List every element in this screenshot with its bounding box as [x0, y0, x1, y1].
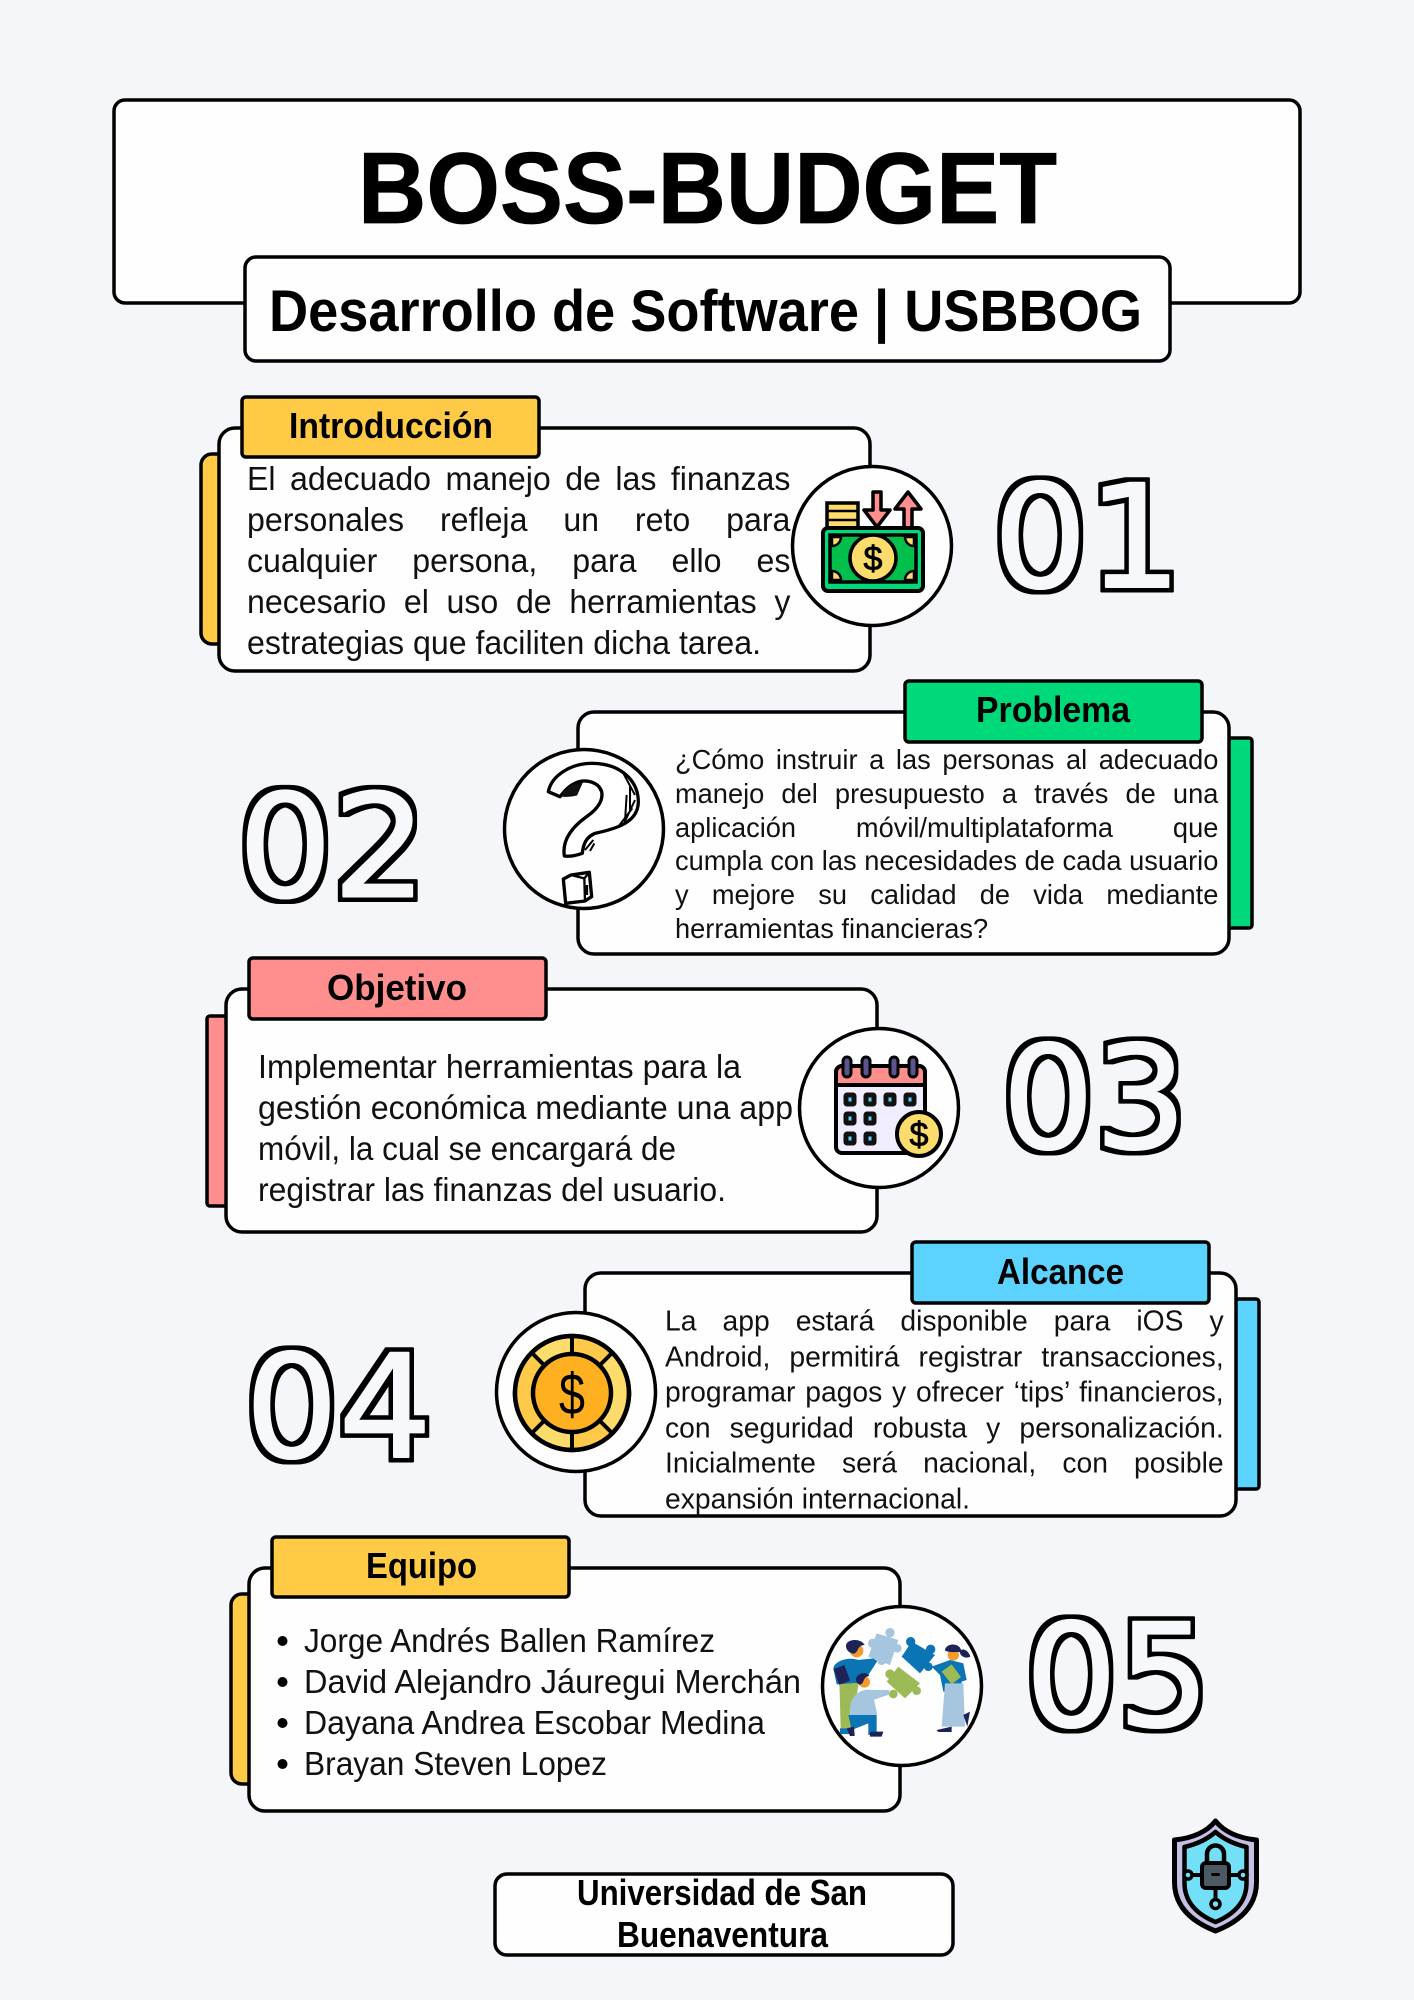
body text: aplicación móvil/multiplataforma que — [675, 812, 1218, 843]
panel: Alcance — [245, 1242, 1259, 1522]
body text: La app estará disponible para iOS y — [665, 1306, 1224, 1338]
body text: herramientas financieras? — [675, 913, 988, 944]
body text: estrategias que faciliten dicha tarea. — [247, 624, 761, 661]
label — [912, 1242, 1209, 1303]
subtitle: Desarrollo de Software | USBBOG — [269, 279, 1142, 344]
body text — [675, 743, 1218, 953]
number 05: 05 — [1025, 1593, 1210, 1760]
body text: Android, permitirá registrar transacciones, — [665, 1341, 1224, 1373]
body text: Implementar herramientas para la — [258, 1048, 742, 1085]
icon: team with puzzle pieces — [822, 1606, 982, 1766]
accent bar — [1210, 738, 1252, 928]
number 02: 02 — [238, 764, 427, 930]
icon: gold coin: $ — [559, 1362, 585, 1427]
body text: ¿Cómo instruir a las personas al adecuado — [675, 744, 1218, 775]
body text: Inicialmente será nacional, con posible — [665, 1448, 1224, 1480]
team list: David Alejandro Jáuregui Merchán — [304, 1663, 801, 1700]
kneeling person — [849, 1690, 889, 1718]
footer: university: Buenaventura — [617, 1914, 829, 1955]
body text: El adecuado manejo de las finanzas — [247, 460, 790, 497]
title panel — [114, 100, 1300, 303]
label — [905, 681, 1202, 742]
body text: cualquier persona, para ello es — [247, 542, 790, 579]
icon: security shield — [1174, 1821, 1256, 1931]
panel: Objetivo — [207, 958, 1187, 1232]
body text: manejo del presupuesto a través de una — [675, 778, 1218, 809]
team list: Jorge Andrés Ballen Ramírez — [304, 1622, 715, 1659]
accent bar — [231, 1594, 271, 1784]
header — [114, 100, 1300, 361]
label — [249, 958, 546, 1019]
team list: Brayan Steven Lopez — [304, 1745, 607, 1782]
label — [242, 397, 539, 457]
subtitle panel — [245, 257, 1170, 361]
body text — [258, 1048, 793, 1208]
number 03: 03 — [1002, 1015, 1187, 1182]
body text: gestión económica mediante una app — [258, 1089, 793, 1126]
footer: university: Universidad de San — [577, 1872, 867, 1913]
label: Introducción — [289, 405, 493, 446]
icon: gold coin — [496, 1312, 656, 1472]
icon: calendar with coin — [800, 1028, 958, 1188]
label: Objetivo — [327, 967, 467, 1008]
number 04: 04 — [245, 1324, 432, 1491]
right person — [932, 1660, 967, 1692]
title: BOSS-BUDGET — [358, 133, 1057, 245]
label: Alcance — [997, 1251, 1124, 1292]
footer: university — [495, 1872, 953, 1955]
body text — [247, 458, 790, 668]
team list — [278, 1622, 801, 1782]
accent bar — [207, 1016, 247, 1206]
card — [219, 428, 870, 671]
body text: registrar las finanzas del usuario. — [258, 1171, 726, 1208]
number 01: 01 — [993, 454, 1182, 621]
icon: calendar with coin: $ — [910, 1116, 929, 1154]
label — [272, 1537, 569, 1597]
card — [226, 989, 877, 1232]
icon: question mark — [504, 750, 664, 908]
card — [249, 1568, 900, 1811]
panel: Problema — [238, 681, 1252, 954]
body text: necesario el uso de herramientas y — [247, 583, 790, 620]
label: Equipo — [366, 1545, 477, 1586]
body text — [665, 1304, 1224, 1522]
body text: personales refleja un reto para — [247, 501, 790, 538]
accent bar — [201, 454, 241, 644]
body text: móvil, la cual se encargará de — [258, 1130, 676, 1167]
panel: Introducción — [201, 397, 1182, 671]
body text: programar pagos y ofrecer ‘tips’ financieros, — [665, 1377, 1224, 1409]
body text: con seguridad robusta y personalización. — [665, 1412, 1224, 1444]
icon: money with arrows: $ — [864, 540, 883, 578]
body text: y mejore su calidad de vida mediante — [675, 879, 1218, 910]
card — [578, 712, 1229, 954]
accent bar — [1217, 1299, 1259, 1489]
panel: Equipo — [231, 1537, 1210, 1811]
label: Problema — [976, 689, 1131, 730]
team list: Dayana Andrea Escobar Medina — [304, 1704, 766, 1741]
card — [585, 1273, 1236, 1516]
icon: money with arrows — [792, 466, 952, 626]
left person — [839, 1680, 859, 1728]
body text: cumpla con las necesidades de cada usuario — [675, 845, 1218, 876]
body text: expansión internacional. — [665, 1483, 970, 1515]
